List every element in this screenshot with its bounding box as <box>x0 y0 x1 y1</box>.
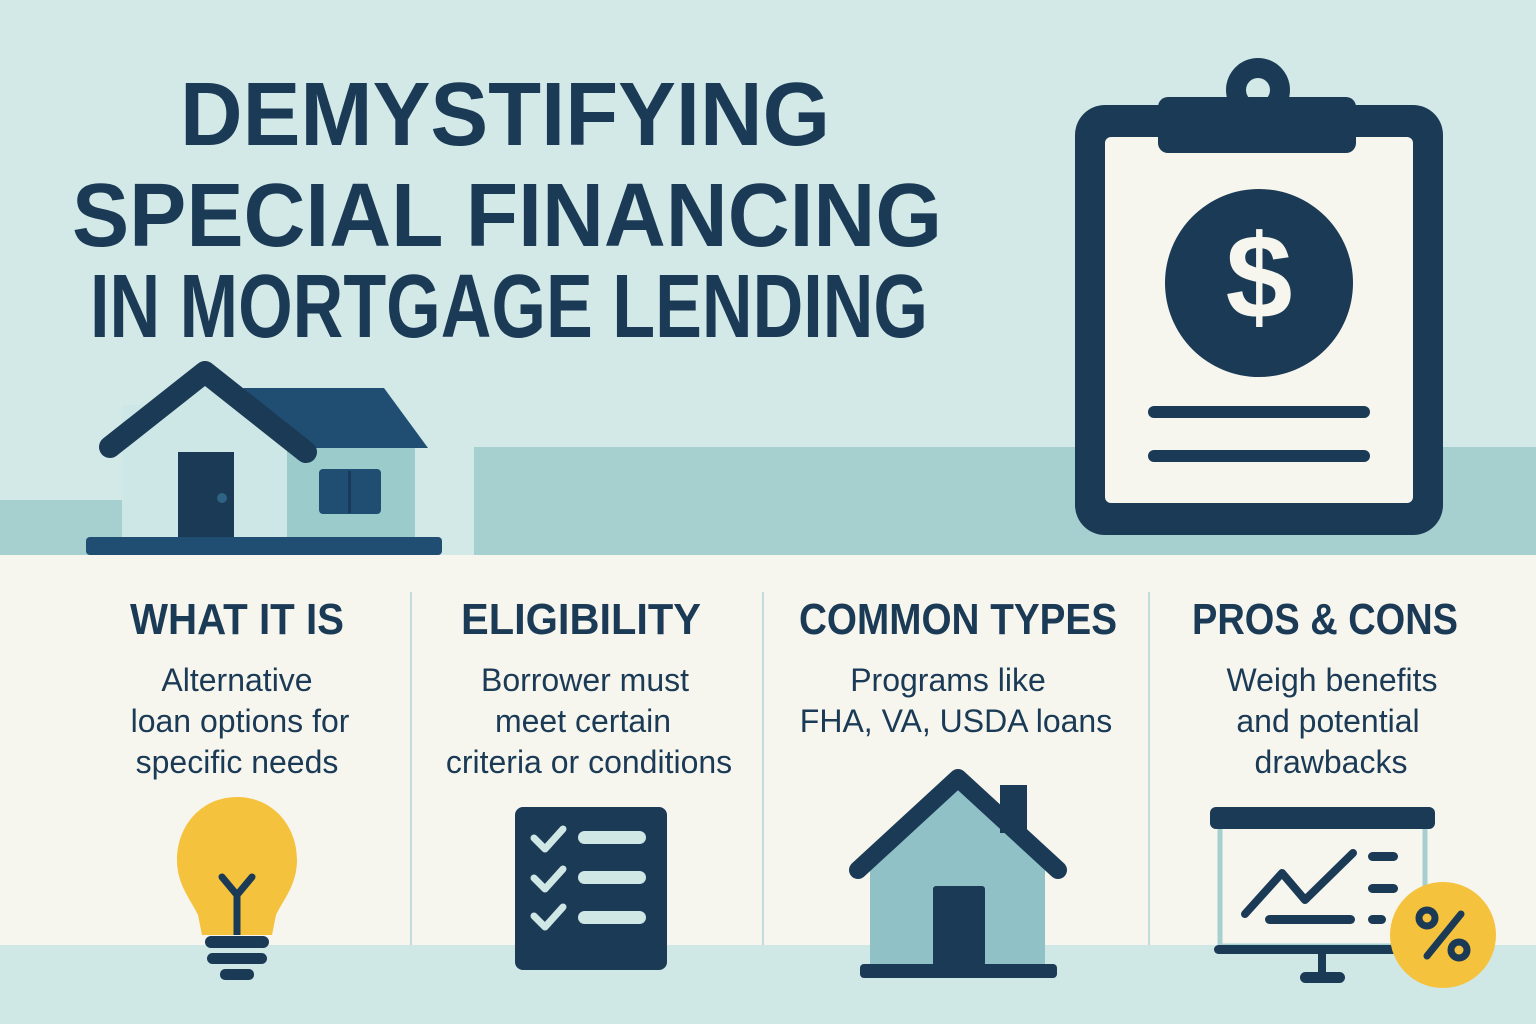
icon: clipboard with dollar <box>1075 58 1443 535</box>
panel: pros and cons: drawbacks <box>1255 744 1407 780</box>
panel: common types <box>799 595 1117 978</box>
title: SPECIAL FINANCING <box>72 166 942 266</box>
panel: what it is: specific needs <box>136 744 338 780</box>
title <box>72 65 942 357</box>
panel: pros and cons: and potential <box>1236 703 1420 739</box>
title: IN MORTGAGE LENDING <box>90 257 928 357</box>
panel: eligibility <box>446 595 732 970</box>
panel: common types: FHA, VA, USDA loans <box>800 703 1112 739</box>
panel: what it is: loan options for <box>131 703 350 739</box>
icon: house illustration <box>86 372 442 555</box>
panel: what it is: WHAT IT IS <box>130 595 344 644</box>
panel: pros and cons <box>1192 595 1496 988</box>
panel: eligibility: ELIGIBILITY <box>461 595 701 644</box>
icon: clipboard with dollar: $ <box>1226 210 1292 344</box>
title: DEMYSTIFYING <box>180 65 830 165</box>
icon: house <box>858 778 1058 978</box>
panel: what it is <box>130 595 350 980</box>
panel: common types: COMMON TYPES <box>799 595 1117 644</box>
panel: pros and cons: PROS & CONS <box>1192 595 1458 644</box>
panel: common types: Programs like <box>850 662 1046 698</box>
icon: presentation chart with percent <box>1210 807 1496 988</box>
panel: eligibility: Borrower must <box>481 662 689 698</box>
icon: light bulb <box>177 797 297 980</box>
panel: eligibility: meet certain <box>495 703 671 739</box>
icon: checklist <box>515 807 667 970</box>
panel: what it is: Alternative <box>161 662 313 698</box>
panel: pros and cons: Weigh benefits <box>1226 662 1438 698</box>
panel: eligibility: criteria or conditions <box>446 744 732 780</box>
